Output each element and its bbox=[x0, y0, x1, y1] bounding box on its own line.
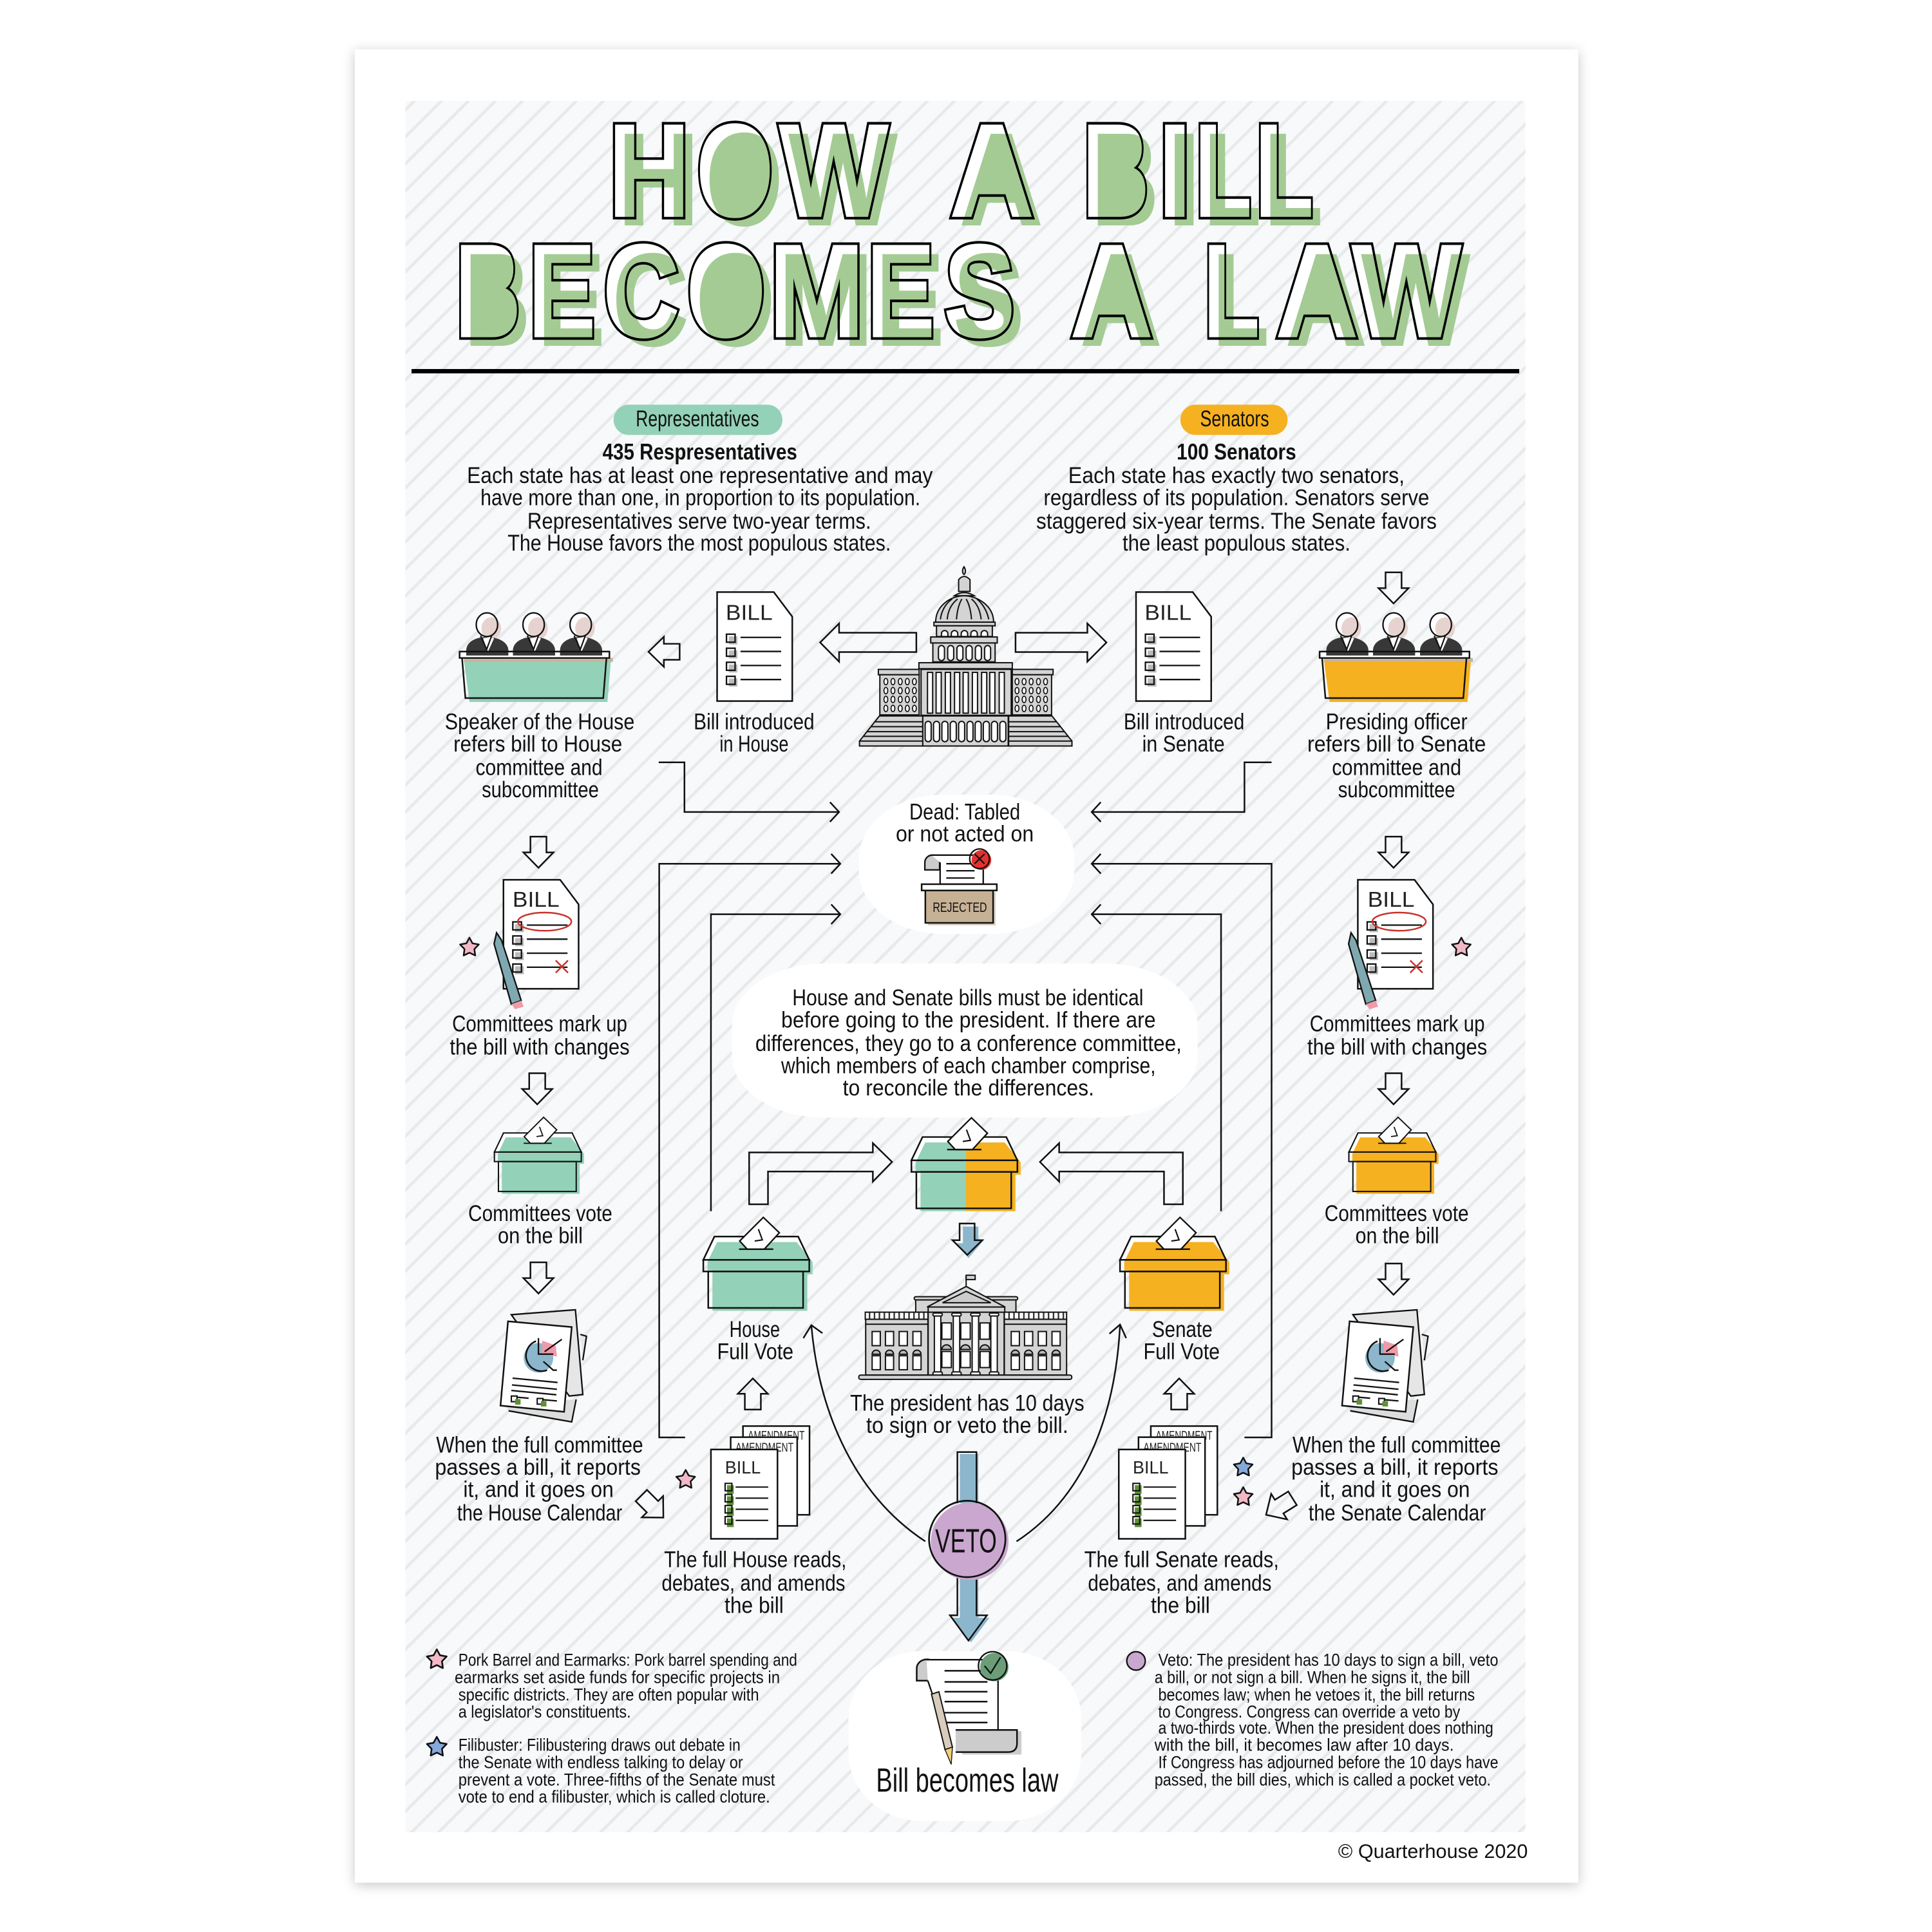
label: president has 10 days bbox=[850, 1391, 1084, 1438]
title: E bbox=[529, 220, 594, 363]
label: Senate Full Vote: Senate bbox=[1152, 1317, 1213, 1342]
arrow: into Senate presiding officer bbox=[1379, 573, 1408, 603]
arrow: veto override to House bbox=[803, 1325, 925, 1541]
title: O bbox=[697, 99, 772, 243]
text block: Senate description: staggered six-year terms. The Senate favors bbox=[1036, 509, 1437, 534]
icon: blue star Senate floor bbox=[1234, 1457, 1253, 1475]
panel: legend pork barrel: specific districts. They are often popular with bbox=[459, 1685, 759, 1704]
icon: pink star Senate markup bbox=[1452, 938, 1471, 956]
label: president has 10 days: to sign or veto the bill. bbox=[866, 1413, 1068, 1438]
icon: Senate bill bbox=[1136, 592, 1211, 701]
label: Senate Full Vote: Full Vote bbox=[1144, 1339, 1220, 1364]
label: House Calendar: passes a bill, it reports bbox=[435, 1455, 641, 1480]
text block: House description: Representatives serve two-year terms. bbox=[527, 509, 871, 534]
panel: legend veto: becomes law; when he vetoes it, the bill returns bbox=[1158, 1685, 1475, 1704]
text block: House description bbox=[467, 440, 933, 556]
title: H bbox=[609, 99, 689, 243]
arrow: veto override to Senate bbox=[1016, 1325, 1126, 1541]
panel: conference committee bubble: differences, they go to a conference committee, bbox=[755, 1031, 1182, 1056]
text block: Senate description: the least populous states. bbox=[1122, 531, 1350, 556]
panel: legend pork barrel: Pork Barrel and Earmarks: Pork barrel spending and bbox=[459, 1651, 797, 1670]
panel: legend pork barrel bbox=[427, 1649, 797, 1721]
arrow: officer to markup bbox=[1379, 837, 1408, 868]
arrow: Senate Calendar to full Senate bbox=[1258, 1486, 1300, 1528]
panel: conference committee bubble bbox=[732, 963, 1198, 1117]
icon: Senate marked-up bill bbox=[1349, 880, 1433, 1009]
label: Presiding officer: committee and bbox=[1332, 755, 1461, 780]
label: House committees vote: Committees vote bbox=[468, 1201, 612, 1226]
panel: conference committee bubble: before going to the president. If there are bbox=[781, 1008, 1156, 1033]
panel: legend pork barrel: a legislator's constituents. bbox=[459, 1702, 631, 1721]
icon: Senate committee ballot box bbox=[1349, 1117, 1439, 1194]
title: L bbox=[1256, 99, 1312, 243]
label: Presiding officer: subcommittee bbox=[1338, 777, 1455, 802]
icon: White House bbox=[859, 1275, 1072, 1379]
label: Senate committees vote: on the bill bbox=[1356, 1223, 1439, 1248]
arrow: House Full Vote to Dead bbox=[711, 904, 840, 1211]
label: House reads debates amends bbox=[661, 1548, 846, 1618]
arrow: House vote to conference bbox=[749, 1143, 892, 1204]
label: Senate committees vote: Committees vote bbox=[1325, 1201, 1469, 1226]
label: Senate reads debates amends: The full Senate reads, bbox=[1084, 1548, 1279, 1573]
title: M bbox=[770, 220, 863, 363]
label: Senate Full Vote bbox=[1144, 1317, 1220, 1364]
arrow: Speaker to markup bbox=[524, 837, 553, 868]
label: Senate committees mark up: Committees mark up bbox=[1310, 1011, 1484, 1036]
arrow: Senate Full Vote to Dead bbox=[1092, 904, 1221, 1211]
icon: Senate marked-up bill: BILL bbox=[1368, 888, 1414, 912]
arrow: Capitol to House bill bbox=[820, 623, 916, 661]
panel: legend filibuster bbox=[427, 1736, 775, 1806]
panel: legend filibuster: prevent a vote. Three-fifths of the Senate must bbox=[459, 1770, 775, 1789]
title: A bbox=[1072, 220, 1151, 363]
title: A bbox=[951, 99, 1032, 243]
label: Presiding officer: refers bill to Senate bbox=[1307, 732, 1486, 757]
icon: signed scroll bbox=[916, 1652, 1021, 1765]
panel: Dead bubble: Dead: Tabled bbox=[909, 799, 1020, 824]
arrow: House Speaker to Dead bbox=[659, 762, 839, 822]
arrow: Capitol to Senate bill bbox=[1016, 623, 1106, 661]
pill: Representatives bbox=[614, 404, 782, 435]
arrow: Senate Calendar to Dead bbox=[1092, 854, 1271, 1437]
panel: conference committee bubble: to reconcile the differences. bbox=[843, 1075, 1094, 1101]
icon: rejected bill: REJECTED bbox=[933, 900, 987, 915]
label: Speaker of the House bbox=[445, 710, 634, 802]
panel: legend veto: If Congress has adjourned before the 10 days have bbox=[1158, 1753, 1499, 1772]
arrow: House amendments to full vote bbox=[738, 1378, 768, 1410]
panel: legend pork barrel: earmarks set aside funds for specific projects in bbox=[455, 1668, 780, 1687]
panel: Dead bubble: or not acted on bbox=[896, 822, 1034, 847]
icon: House bill: BILL bbox=[726, 601, 773, 625]
label: Senate committees mark up bbox=[1307, 1011, 1487, 1060]
text block: House description: have more than one, in proportion to its population. bbox=[480, 485, 920, 510]
title: E bbox=[867, 220, 934, 363]
text block: Senate description: 100 Senators bbox=[1177, 440, 1296, 465]
title: I bbox=[1159, 99, 1190, 243]
icon: pink star Senate floor bbox=[1234, 1487, 1253, 1505]
label: House Full Vote: Full Vote bbox=[717, 1339, 793, 1364]
icon: House bill bbox=[717, 592, 792, 701]
title: B bbox=[1084, 99, 1148, 243]
panel: legend veto bbox=[1127, 1651, 1499, 1789]
panel: legend veto: a two-thirds vote. When the president does nothing bbox=[1158, 1718, 1493, 1738]
label: Senate reads debates amends: the bill bbox=[1151, 1593, 1210, 1618]
panel: legend veto: Veto: The president has 10 days to sign a bill, veto bbox=[1158, 1651, 1499, 1670]
pill: Representatives: Representatives bbox=[636, 406, 759, 431]
text block: House description: The House favors the most populous states. bbox=[507, 531, 891, 556]
footer credit: © Quarterhouse 2020 bbox=[1338, 1841, 1528, 1862]
label: Senate reads debates amends bbox=[1084, 1548, 1279, 1618]
label: Presiding officer: Presiding officer bbox=[1326, 710, 1468, 735]
title: B bbox=[457, 220, 520, 363]
label: House reads debates amends: The full House reads, bbox=[664, 1548, 846, 1573]
pill: Senators: Senators bbox=[1200, 406, 1269, 431]
panel: legend veto: to Congress. Congress can override a veto by bbox=[1158, 1702, 1461, 1721]
panel: legend veto: passed, the bill dies, which is called a pocket veto. bbox=[1155, 1770, 1491, 1789]
panel: legend veto: with the bill, it becomes law after 10 days. bbox=[1154, 1736, 1454, 1755]
label: House reads debates amends: debates, and amends bbox=[661, 1571, 845, 1596]
arrow: president to veto bbox=[958, 1452, 978, 1503]
icon: Capitol building bbox=[860, 567, 1072, 746]
arrow: Senate officer to Dead bbox=[1092, 762, 1271, 822]
icon: pink star House markup bbox=[460, 938, 478, 956]
label: president has 10 days: The president has 10 days bbox=[850, 1391, 1084, 1416]
icon: House amendments stack: AMENDMENT bbox=[748, 1429, 805, 1443]
text block: Senate description: regardless of its population. Senators serve bbox=[1044, 485, 1429, 510]
label: House Calendar: the House Calendar bbox=[457, 1501, 622, 1526]
arrow: House bill to Speaker bbox=[649, 637, 679, 667]
arrow: to House report bbox=[524, 1262, 553, 1294]
arrow: to Senate committee vote bbox=[1379, 1073, 1408, 1104]
pill: Senators bbox=[1180, 404, 1287, 435]
title: L bbox=[1204, 220, 1258, 363]
panel: conference committee bubble: House and Senate bills must be identical bbox=[792, 985, 1144, 1010]
panel: legend filibuster: Filibuster: Filibustering draws out debate in bbox=[459, 1736, 741, 1755]
label: House committees mark up: Committees mark up bbox=[452, 1011, 627, 1036]
text block: House description: 435 Respresentatives bbox=[603, 440, 797, 465]
arrow: Senate vote to conference bbox=[1040, 1143, 1183, 1204]
title: W bbox=[1353, 220, 1460, 363]
icon: Senate amendments stack: BILL bbox=[1133, 1457, 1169, 1477]
striped background panel bbox=[405, 101, 1526, 1832]
label: House Calendar bbox=[435, 1433, 643, 1526]
label: Speaker of the House: committee and bbox=[476, 755, 603, 780]
icon: Senate bill: BILL bbox=[1144, 601, 1191, 625]
icon: rejected bill bbox=[922, 849, 997, 925]
label: Senate reads debates amends: debates, and amends bbox=[1088, 1571, 1271, 1596]
icon: Senate panel bbox=[1320, 613, 1473, 702]
icon: House marked-up bill: BILL bbox=[513, 888, 560, 912]
arrow: House Calendar to Dead bbox=[659, 854, 840, 1437]
label: Senate Calendar: it, and it goes on bbox=[1320, 1477, 1470, 1502]
label: Bill introduced in Senate: Bill introduced bbox=[1124, 710, 1244, 735]
label: House Calendar: it, and it goes on bbox=[463, 1477, 614, 1502]
text block: Senate description bbox=[1036, 440, 1437, 556]
label: House Full Vote: House bbox=[730, 1317, 780, 1342]
label: Speaker of the House: Speaker of the House bbox=[445, 710, 634, 735]
title: A bbox=[1277, 220, 1356, 363]
label: House committees vote bbox=[468, 1201, 612, 1248]
icon: House full vote ballot box bbox=[703, 1217, 813, 1311]
label: Senate Calendar bbox=[1291, 1433, 1501, 1526]
icon: House amendments stack: BILL bbox=[725, 1457, 761, 1477]
poster sheet bbox=[355, 50, 1578, 1882]
panel: legend veto: a bill, or not sign a bill. When he signs it, the bill bbox=[1155, 1668, 1470, 1687]
icon: Senate amendments stack: AMENDMENT bbox=[1156, 1429, 1213, 1443]
label: Presiding officer bbox=[1307, 710, 1486, 802]
panel: legend filibuster: the Senate with endless talking to delay or bbox=[459, 1753, 743, 1772]
icon: Senate amendments stack: AMENDMENT bbox=[1144, 1441, 1202, 1455]
title: L bbox=[1196, 99, 1251, 243]
icon: House panel bbox=[460, 613, 613, 702]
icon: House marked-up bill bbox=[494, 880, 578, 1009]
arrow: veto to law bbox=[950, 1577, 989, 1642]
label: House Full Vote bbox=[717, 1317, 793, 1364]
icon: pink star House floor bbox=[676, 1470, 695, 1488]
icon: Senate full vote ballot box bbox=[1120, 1217, 1229, 1311]
label: House Calendar: When the full committee bbox=[436, 1433, 643, 1458]
title: C bbox=[604, 220, 678, 363]
text block: House description: Each state has at least one representative and may bbox=[467, 463, 933, 488]
arrow: to Senate report bbox=[1379, 1264, 1408, 1294]
label: Senate Calendar: the Senate Calendar bbox=[1309, 1501, 1486, 1526]
icon: veto circle bbox=[929, 1501, 1009, 1580]
label: Senate Calendar: passes a bill, it reports bbox=[1291, 1455, 1499, 1480]
icon: veto circle: VETO bbox=[935, 1522, 997, 1560]
panel: Dead bubble bbox=[859, 795, 1074, 934]
arrow: to House committee vote bbox=[522, 1073, 553, 1104]
icon: Senate amendments stack bbox=[1119, 1426, 1217, 1539]
label: House committees vote: on the bill bbox=[498, 1223, 583, 1248]
title bbox=[459, 120, 1471, 347]
icon: Senate committee report bbox=[1342, 1310, 1428, 1422]
panel: Bill becomes law bubble bbox=[848, 1651, 1081, 1821]
label: Bill introduced in House: in House bbox=[719, 732, 788, 757]
panel: conference committee bubble: which members of each chamber comprise, bbox=[781, 1053, 1156, 1078]
label: Bill introduced in House: Bill introduced bbox=[694, 710, 815, 735]
arrow: House Calendar to full House bbox=[630, 1485, 674, 1528]
label: House committees mark up bbox=[450, 1011, 630, 1060]
icon: House amendments stack: AMENDMENT bbox=[735, 1441, 793, 1455]
arrow: Senate amendments to full vote bbox=[1164, 1378, 1194, 1410]
text block: Senate description: Each state has exactly two senators, bbox=[1068, 463, 1405, 488]
label: House committees mark up: the bill with changes bbox=[450, 1035, 630, 1060]
label: Bill introduced in Senate bbox=[1124, 710, 1244, 757]
label: Senate committees mark up: the bill with changes bbox=[1307, 1035, 1487, 1060]
title: W bbox=[781, 99, 887, 243]
label: Senate Calendar: When the full committee bbox=[1293, 1433, 1501, 1458]
label: House reads debates amends: the bill bbox=[724, 1593, 784, 1618]
title: S bbox=[945, 220, 1014, 363]
icon: House committee report bbox=[500, 1310, 587, 1422]
arrow: conference to president bbox=[952, 1224, 985, 1258]
panel: legend filibuster: vote to end a filibuster, which is called cloture. bbox=[459, 1787, 770, 1806]
label: Bill introduced in House bbox=[694, 710, 815, 757]
panel: Bill becomes law bubble: Bill becomes law bbox=[876, 1761, 1059, 1799]
icon: House committee ballot box bbox=[495, 1117, 584, 1194]
label: Bill introduced in Senate: in Senate bbox=[1142, 732, 1225, 757]
icon: conference ballot box bbox=[911, 1118, 1021, 1211]
label: Senate committees vote bbox=[1325, 1201, 1469, 1248]
label: Speaker of the House: refers bill to House bbox=[453, 732, 622, 757]
icon: House amendments stack bbox=[711, 1426, 810, 1539]
title: O bbox=[688, 220, 764, 363]
label: Speaker of the House: subcommittee bbox=[482, 777, 599, 802]
